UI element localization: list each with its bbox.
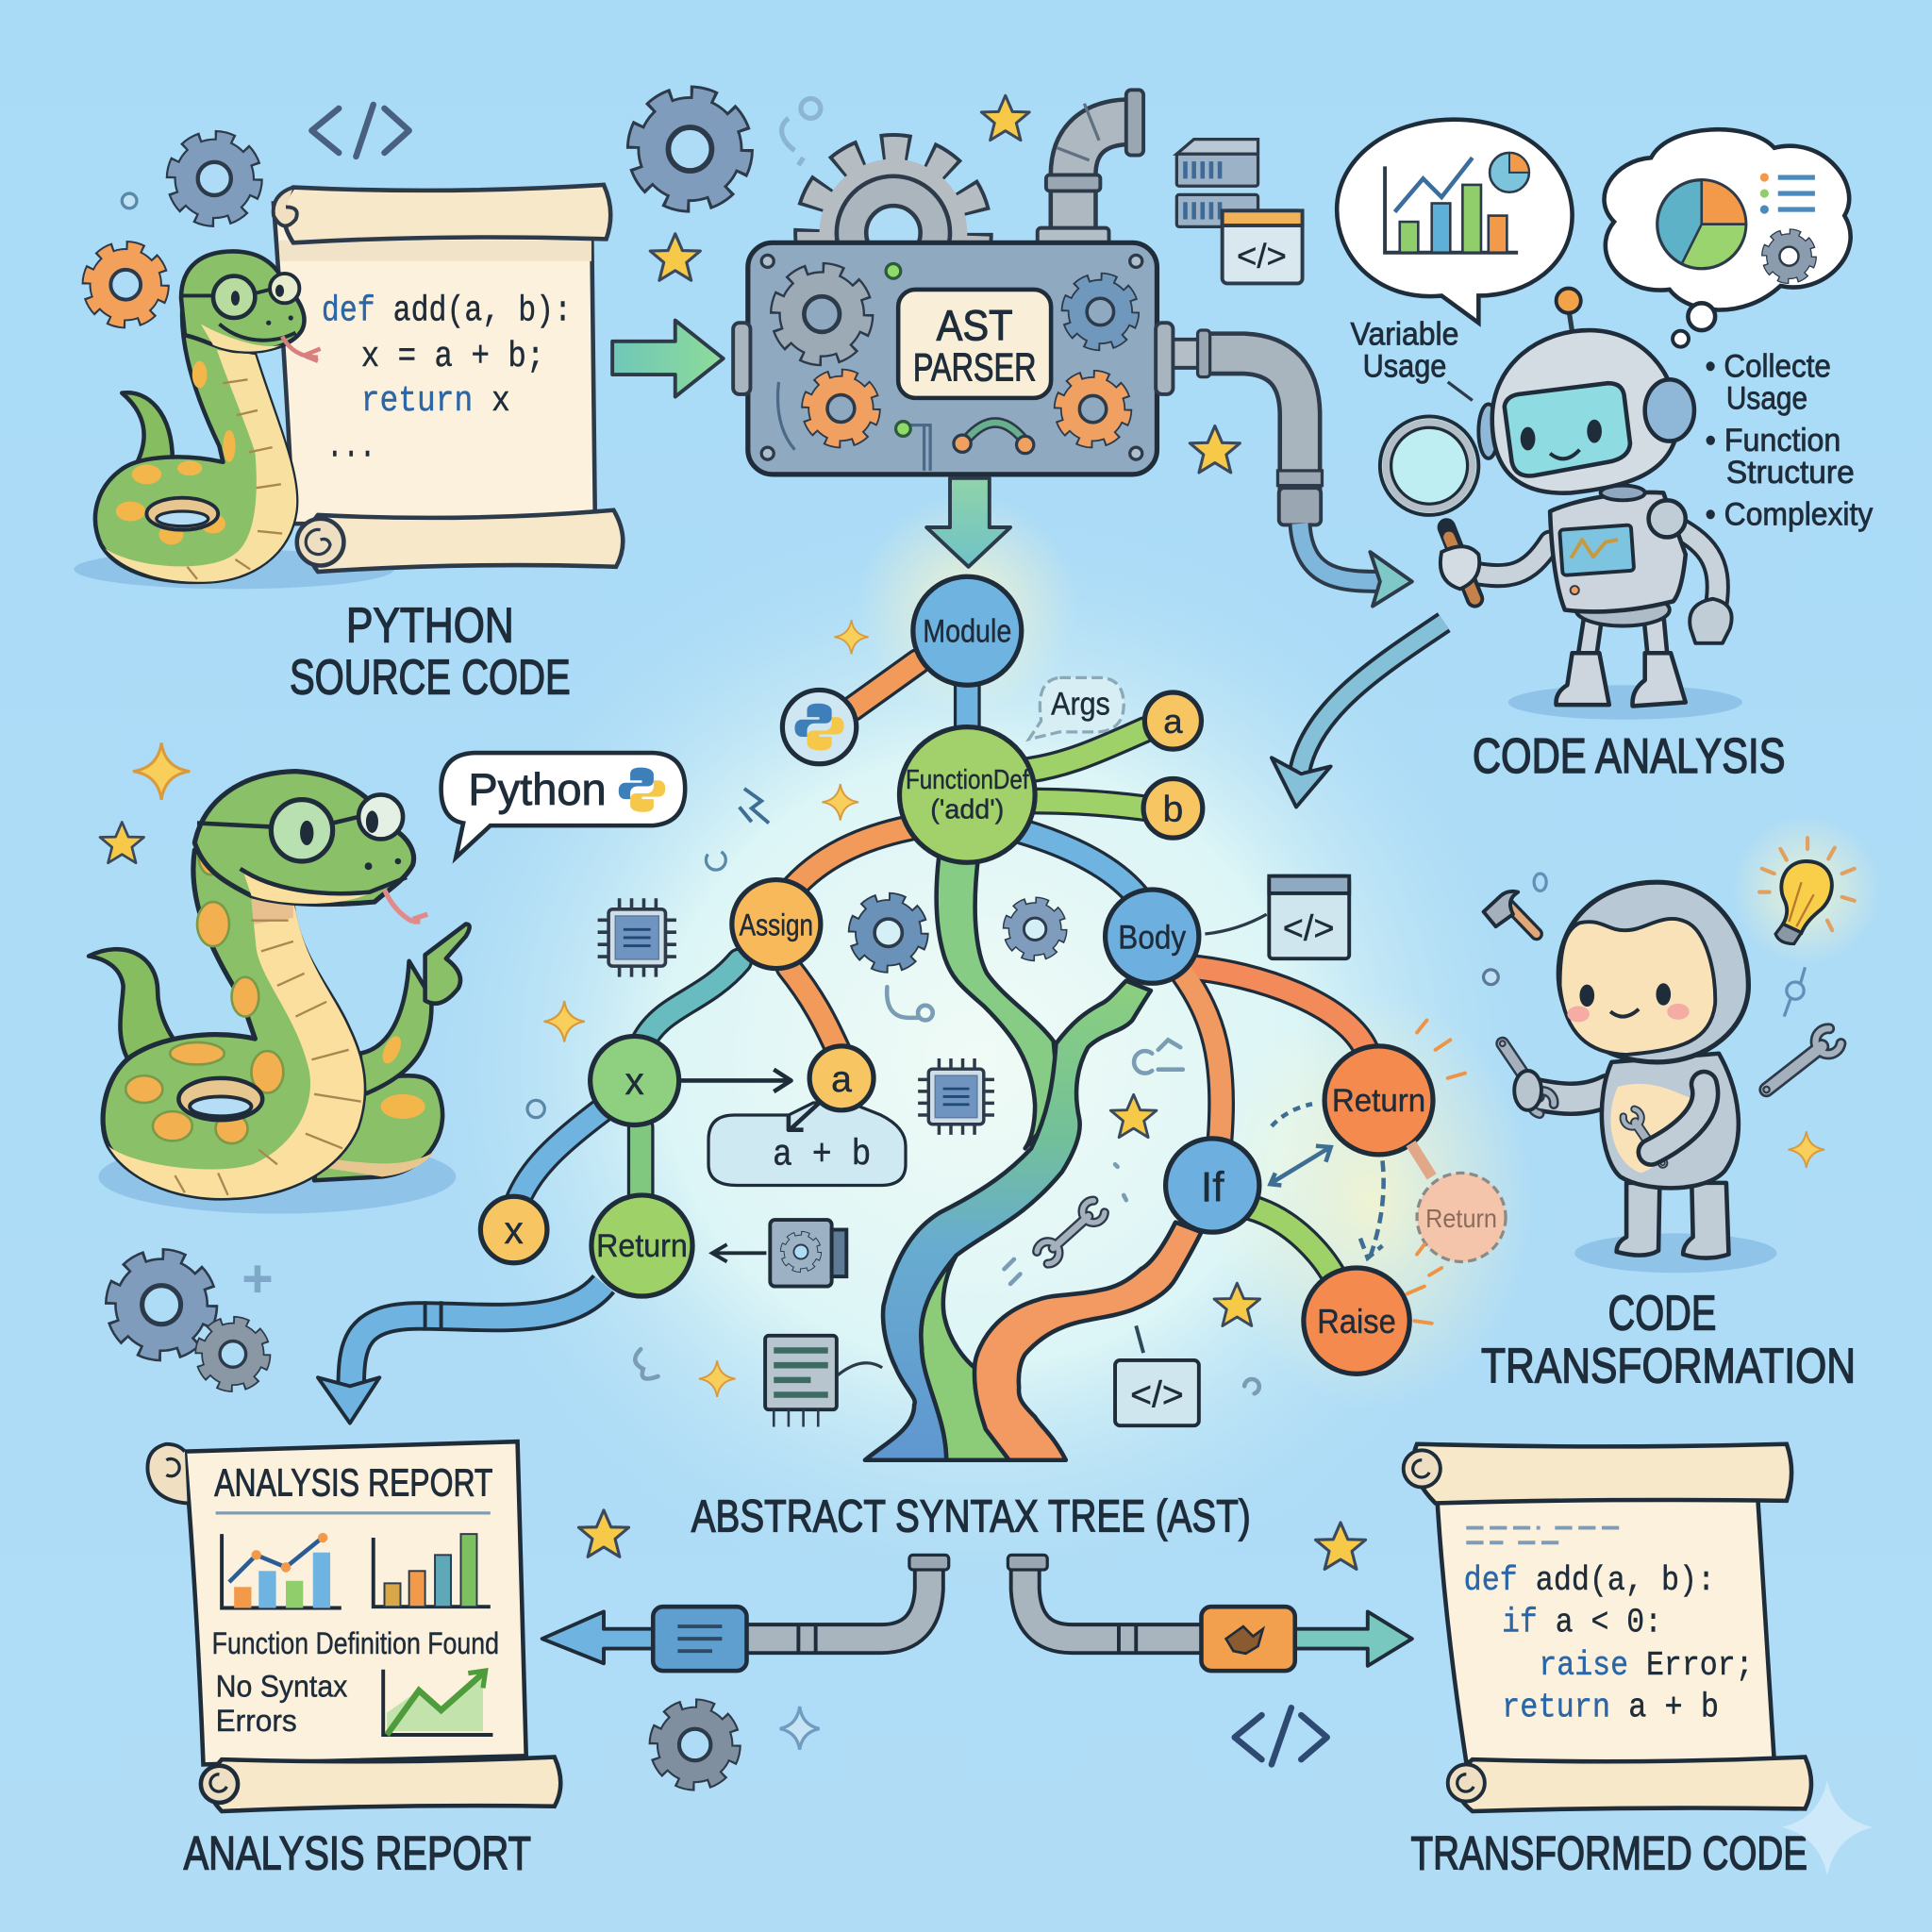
tree glow [400, 506, 1558, 1614]
arrow: return to report [318, 1284, 604, 1424]
helmet [1558, 882, 1748, 1062]
icon: chip center [918, 1058, 994, 1135]
expression box: a + b [708, 1103, 906, 1185]
title: SOURCE CODE [290, 650, 571, 705]
trunk: bottom green [921, 1256, 1017, 1460]
chart 1 [222, 1533, 341, 1607]
robot [1534, 882, 1748, 1258]
node: Return orange: Return [1332, 1083, 1425, 1119]
code text: x = a + b; [361, 337, 544, 377]
code text: if a < 0: [1502, 1603, 1662, 1641]
node: Return green: Return [596, 1228, 688, 1264]
right arm [1670, 524, 1718, 604]
node: a assigned: a [831, 1059, 852, 1100]
parser label: AST [937, 301, 1013, 349]
icon: code window right: </> [1283, 909, 1334, 949]
chart 3 [383, 1670, 492, 1735]
title: TRANSFORMED CODE [1411, 1826, 1807, 1879]
icon: chip left [598, 898, 676, 977]
icon: large top gear [812, 152, 974, 314]
label: variable usage [1351, 317, 1473, 400]
arrow: analysis to tree [1272, 623, 1444, 808]
pipe: left output [542, 1555, 949, 1671]
node: FunctionDef [899, 727, 1035, 862]
icon: small marks [635, 987, 1259, 1393]
panel: code transformation [1481, 813, 1883, 1393]
icon: light bulb [1730, 813, 1883, 966]
sparkle [1788, 1131, 1824, 1168]
icon: hammer [1484, 891, 1537, 934]
label: bullet list [1706, 349, 1873, 532]
node: python logo [782, 690, 857, 764]
node: b [1143, 778, 1203, 838]
icon: gear top left [639, 97, 741, 201]
icon: document box [765, 1336, 837, 1426]
node: Raise [1304, 1268, 1409, 1374]
star [578, 1510, 629, 1557]
label: variable usage: Usage [1363, 349, 1446, 385]
title: CODE [1607, 1286, 1716, 1341]
arrow: source to parser [612, 321, 724, 397]
code text: def add(a, b): [322, 291, 572, 332]
parser label: PARSER [913, 345, 1036, 390]
sparkle [699, 1360, 735, 1397]
scroll [274, 185, 623, 572]
arrow: x to a [680, 1070, 820, 1130]
chart 2 [374, 1534, 491, 1607]
label: Args: Args [1051, 687, 1110, 723]
panel: report gears [115, 1259, 271, 1385]
label: bullet list: • Complexity [1706, 496, 1873, 532]
trunk: body to blue [865, 981, 1151, 1460]
code text: raise Error; [1539, 1646, 1754, 1685]
title: PYTHON [346, 598, 514, 653]
icon: right pipe [1171, 330, 1322, 525]
node: a: a [1163, 702, 1183, 741]
star [100, 822, 144, 863]
label: variable usage: Variable [1351, 317, 1458, 353]
trunk: orange [974, 1223, 1201, 1460]
icon: wrench right [1757, 1025, 1843, 1102]
pipe: right output [1008, 1555, 1412, 1671]
panel: code analysis robot [1337, 120, 1873, 784]
star [650, 234, 700, 280]
node: b: b [1163, 790, 1183, 830]
star [1110, 1094, 1157, 1138]
thought bubble pie [1605, 129, 1851, 347]
node: Return ghost [1417, 1173, 1506, 1261]
arm right [1651, 1084, 1706, 1152]
code text [1464, 1561, 1754, 1726]
trunks [865, 857, 1201, 1460]
star [1214, 1283, 1260, 1325]
arrow: parser to tree [926, 478, 1010, 567]
node: x leaf [480, 1196, 547, 1263]
icon: code window: </> [1237, 236, 1287, 275]
panel: transformed code [1404, 1444, 1811, 1879]
node: Module: Module [923, 613, 1011, 649]
title [1481, 1286, 1856, 1393]
icon: code window [1223, 210, 1303, 283]
icon: faint squiggle [782, 98, 821, 165]
icon: wrench left [1491, 1035, 1557, 1116]
icon: wrench center [1035, 1198, 1107, 1266]
left arm [1534, 1091, 1607, 1099]
label: bullet list: Usage [1726, 381, 1807, 417]
parser label [898, 290, 1051, 398]
glow: right nodes [1214, 991, 1534, 1411]
title: ABSTRACT SYNTAX TREE (AST) [691, 1491, 1251, 1542]
code text: return a + b [1502, 1688, 1719, 1726]
arrow: pipe to robot [1300, 524, 1412, 607]
icon: code window bottom [1115, 1325, 1199, 1425]
report text: Errors [216, 1703, 297, 1738]
snake large [89, 772, 470, 1198]
expression box: a + b: a + b [773, 1133, 871, 1175]
branches [518, 661, 1368, 1281]
icon: blue gear [175, 140, 254, 218]
speech bubble: Python: Python [468, 764, 607, 814]
icon: gear middle right [1008, 903, 1061, 956]
sparkle: outline [780, 1707, 820, 1750]
node: a assigned [809, 1046, 874, 1110]
decorative rays [1407, 1020, 1465, 1324]
icon: wrench hand [1622, 1108, 1672, 1170]
node: x leaf: x [505, 1208, 524, 1252]
gears on machine [780, 272, 1132, 441]
label: bullet list: • Function [1706, 423, 1840, 458]
icon: code brackets [311, 105, 409, 157]
icon: code brackets [1235, 1707, 1327, 1764]
icon: top pipe [1038, 90, 1143, 245]
icon: gear bottom [658, 1707, 732, 1782]
node: Body [1106, 890, 1199, 983]
node: FunctionDef: FunctionDef [906, 765, 1029, 795]
machine body [748, 242, 1157, 475]
code text: return x [361, 381, 510, 422]
arrows between nodes [1271, 1104, 1384, 1258]
robot [1473, 289, 1732, 706]
title: CODE ANALYSIS [1473, 729, 1786, 784]
report heading: ANALYSIS REPORT [214, 1461, 492, 1505]
sparkle [544, 1001, 585, 1041]
branch outlines [518, 661, 1368, 1281]
node: FunctionDef: ('add') [930, 794, 1004, 824]
torso [1602, 1054, 1739, 1188]
code text: ... [326, 426, 375, 467]
node: Assign: Assign [740, 907, 813, 941]
icon: server stack [1176, 140, 1258, 226]
panel: python mascot [89, 742, 685, 1214]
panel: abstract syntax tree [480, 576, 1534, 1542]
icon: gear box [770, 1220, 846, 1287]
icon: orange gear [91, 249, 161, 320]
title: ANALYSIS REPORT [184, 1826, 531, 1879]
node: Module [913, 576, 1022, 685]
panel: AST parser machine [639, 90, 1322, 525]
panel: python source code [74, 105, 623, 705]
label: Args [1029, 677, 1124, 740]
scroll [147, 1441, 560, 1811]
icon: hand left [1514, 1071, 1541, 1110]
head [1478, 404, 1498, 458]
sparkle [834, 620, 869, 654]
node: x: x [625, 1059, 644, 1103]
sparkle [822, 784, 858, 821]
node: If [1166, 1139, 1259, 1232]
report text [212, 1625, 499, 1738]
star [1316, 1523, 1366, 1569]
star [1190, 426, 1240, 473]
code text [322, 291, 572, 467]
icon: magnifying glass [1380, 416, 1479, 599]
report text: No Syntax [216, 1669, 347, 1704]
star [981, 95, 1029, 141]
antenna [1569, 308, 1574, 340]
legs [1617, 1183, 1728, 1258]
label: bullet list: • Collecte [1706, 349, 1831, 385]
branch colors [959, 677, 975, 740]
snake small [95, 251, 321, 582]
icon: code window bottom: </> [1130, 1375, 1184, 1416]
title [290, 598, 571, 705]
left arm [1473, 542, 1550, 575]
node: Raise: Raise [1317, 1302, 1396, 1341]
scroll [1404, 1444, 1811, 1811]
node: Return green [591, 1195, 692, 1296]
node: Return ghost: Return [1425, 1204, 1497, 1233]
icon: code window right [1269, 876, 1349, 958]
torso [1550, 492, 1686, 611]
node: x [591, 1036, 679, 1124]
node: Return orange [1324, 1046, 1433, 1155]
trunk: left green [937, 857, 1059, 1148]
node: If: If [1201, 1164, 1224, 1210]
node: a [1144, 692, 1201, 749]
sparkle [133, 742, 190, 800]
speech bubble chart [1337, 120, 1573, 323]
title: TRANSFORMATION [1481, 1339, 1856, 1393]
node: Assign [732, 880, 821, 969]
speech bubble: Python [441, 753, 685, 858]
label: bullet list: Structure [1726, 455, 1855, 491]
node: Body: Body [1118, 920, 1186, 957]
glow: module [857, 492, 1078, 715]
icon: gear middle left [856, 900, 921, 965]
report text: Function Definition Found [212, 1625, 499, 1660]
legs [1557, 613, 1686, 706]
panel: analysis report [147, 1441, 560, 1879]
code text: def add(a, b): [1464, 1561, 1715, 1600]
watermark sparkle [1782, 1780, 1873, 1875]
